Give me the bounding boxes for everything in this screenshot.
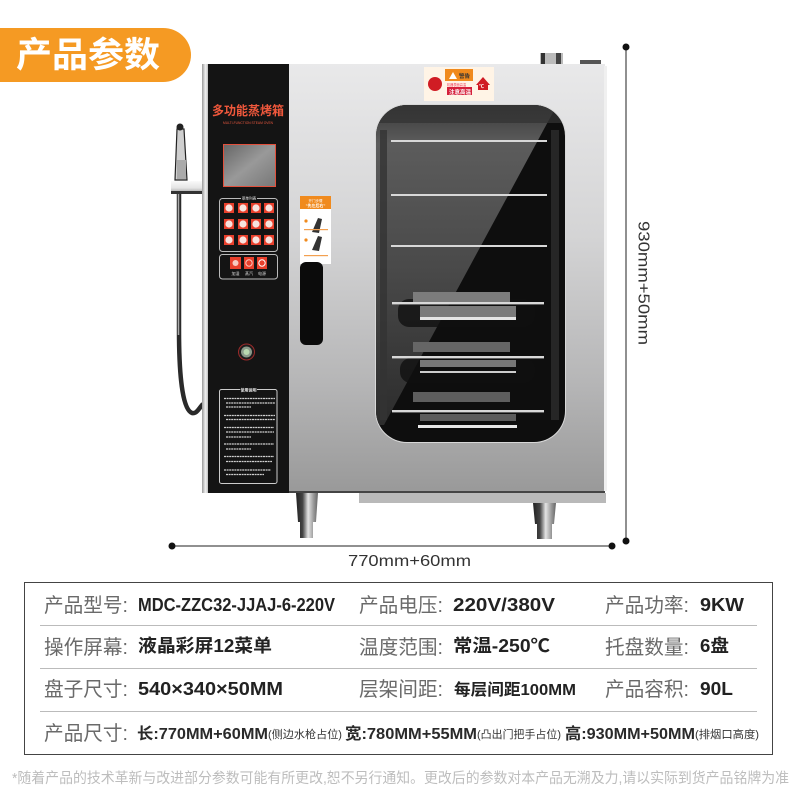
row 1	[44, 594, 744, 617]
dimension: width	[168, 542, 616, 570]
window glass reflection	[376, 105, 557, 425]
dimension: width: 770mm+60mm	[348, 553, 471, 570]
touch screen	[224, 144, 276, 186]
black control panel	[208, 64, 289, 493]
oven window	[375, 104, 566, 443]
row 2: 托盘数量:	[605, 636, 689, 659]
row 4: 高:930MM+50MM	[565, 724, 695, 743]
row 1: MDC-ZZC32-JJAJ-6-220V	[138, 595, 335, 615]
door instruction sticker: 开门步骤	[308, 198, 323, 203]
row 2	[44, 635, 729, 659]
function buttons: 加湿	[232, 270, 240, 276]
row 2: 温度范围:	[359, 636, 443, 659]
function buttons: 电源	[258, 270, 266, 276]
row 4: (凸出门把手占位)	[477, 727, 561, 741]
row 3: 盘子尺寸:	[44, 678, 128, 701]
panel subtitle: MULTI-FUNCTION STEAM OVEN	[223, 121, 274, 125]
row 2: 常温-250℃	[453, 636, 550, 656]
row 3	[44, 678, 733, 701]
footnote disclaimer: *随着产品的技术革新与改进部分参数可能有所更改,恕不另行通知。更改后的参数对本产品无溯及力,请以实际到货产品铭牌为准	[12, 770, 789, 787]
row 3: 540×340×50MM	[138, 679, 283, 699]
row 4	[44, 722, 759, 745]
warning sticker: ℃	[479, 84, 484, 90]
row 4: 产品尺寸:	[44, 722, 128, 745]
row 1: 产品功率:	[605, 594, 689, 617]
menu keypad	[220, 196, 278, 252]
row 1: 220V/380V	[453, 595, 555, 615]
usage notice box: 使用说明	[240, 386, 256, 392]
door instruction sticker: "先左后右"	[306, 202, 325, 208]
function buttons	[220, 254, 278, 279]
baking trays	[398, 292, 517, 428]
dimension: height	[622, 44, 652, 544]
row 3: 90L	[700, 679, 733, 699]
row 4: 长:770MM+60MM	[137, 725, 268, 743]
row 2: 操作屏幕:	[44, 636, 128, 659]
oven chimney	[540, 53, 601, 64]
oven door body	[289, 64, 605, 493]
function buttons: 蒸汽	[245, 270, 253, 276]
warning sticker: 警告	[459, 72, 471, 80]
row 4: (排烟口高度)	[695, 727, 759, 741]
banner: product parameters	[0, 28, 191, 82]
row 1: 9KW	[700, 595, 744, 615]
indicator light	[238, 344, 254, 360]
warning sticker: 机器表面高温	[447, 82, 467, 87]
menu keypad: 菜单列表	[242, 196, 257, 201]
banner heading: 产品参数	[16, 36, 160, 75]
specification table	[24, 582, 772, 754]
oven	[202, 53, 607, 539]
icon: water spray gun with hose	[171, 124, 203, 413]
panel title: 多功能蒸烤箱	[212, 103, 284, 118]
row 2: 6盘	[700, 635, 729, 656]
row 4: (侧边水枪占位)	[268, 727, 342, 741]
row 1: 产品电压:	[359, 594, 443, 617]
shelf rails	[391, 140, 547, 412]
usage notice box	[220, 386, 277, 484]
oven feet	[296, 493, 556, 539]
warning sticker: 注意高温	[449, 88, 472, 96]
row 2: 液晶彩屏12菜单	[138, 636, 272, 656]
door handle	[300, 262, 323, 345]
oven left edge strip	[202, 64, 209, 493]
row 3: 产品容积:	[605, 678, 689, 701]
row 4: 宽:780MM+55MM	[345, 724, 477, 743]
dimension: height: 930mm+50mm	[634, 221, 652, 345]
warning sticker	[424, 67, 494, 101]
row 3: 每层间距100MM	[454, 680, 576, 699]
door instruction sticker	[300, 196, 331, 264]
row 3: 层架间距:	[359, 678, 443, 701]
row 1: 产品型号:	[44, 594, 128, 617]
oven bottom drip tray	[289, 491, 606, 503]
